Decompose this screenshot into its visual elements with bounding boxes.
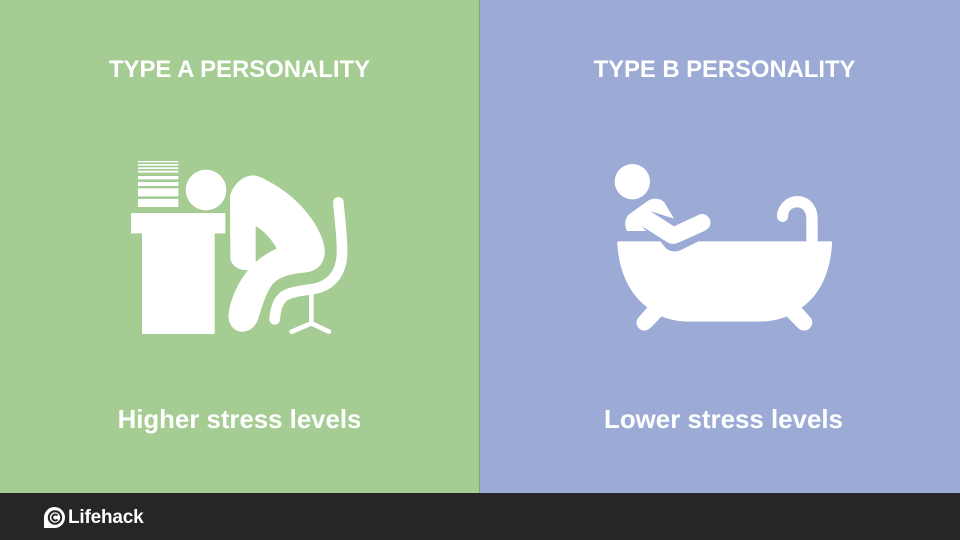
icon: stressed person slumped at desk [131,161,348,334]
icon: chair [275,202,342,332]
icon: bathtub [617,196,832,331]
icon: person relaxing in bathtub [614,164,832,331]
icon: slumped body [228,175,325,332]
icon: head [615,164,650,199]
heading: type A: TYPE A PERSONALITY [109,56,370,83]
panel: type A [0,0,480,493]
panel: type B [479,0,960,493]
icon: head [186,170,226,210]
footer bar [0,493,960,540]
icon: Lifehack swirl mark [44,507,65,528]
heading: type B: TYPE B PERSONALITY [594,56,855,83]
logo: Lifehack [44,507,144,528]
icon: paper stack [138,161,178,207]
caption: higher stress: Higher stress levels [118,406,361,434]
logo wordmark: Lifehack [68,507,144,528]
icon: torso and arm [625,199,711,244]
icon: desk [131,213,225,334]
caption: lower stress: Lower stress levels [604,406,843,434]
